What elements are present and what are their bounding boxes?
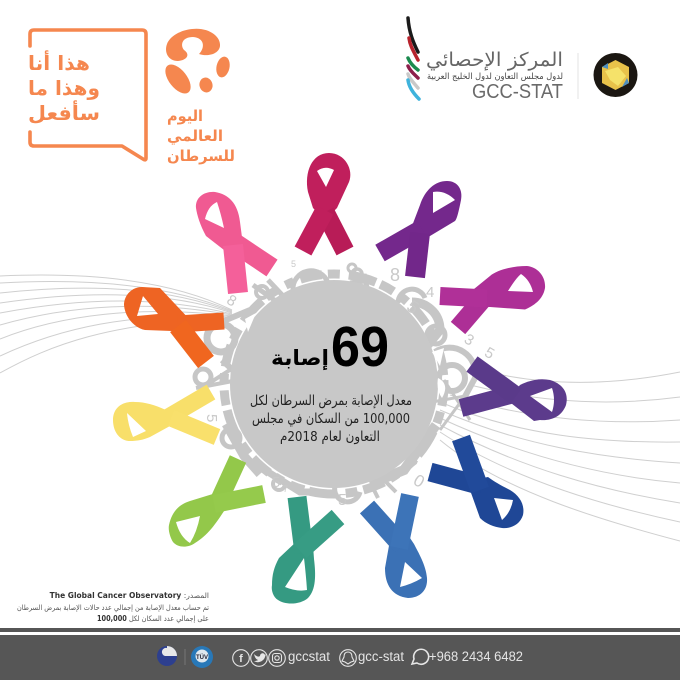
phone number: +968 2434 6482 xyxy=(429,649,523,664)
arabic name: المركز الإحصائي xyxy=(426,49,563,71)
ribbon: green xyxy=(169,459,264,547)
scattered digits: 4 xyxy=(426,284,434,301)
ribbon: pink xyxy=(196,192,272,293)
scattered digits: 5 xyxy=(291,259,296,269)
slogan text: سأفعل xyxy=(28,99,100,125)
ribbon: deep purple xyxy=(461,364,567,421)
ribbon: yellow xyxy=(113,392,217,441)
source note: تم حساب معدل الإصابة من إجمالي عدد حالات الإصابة بمرض السرطان xyxy=(17,603,209,612)
scattered digits: 3 xyxy=(461,331,477,349)
scattered digits: 0 xyxy=(410,471,428,492)
scattered digits: 8 xyxy=(224,291,239,310)
description: التعاون لعام 2018م xyxy=(280,429,380,445)
footer band xyxy=(0,628,680,680)
scattered digits: 5 xyxy=(403,296,423,318)
logo caption: للسرطان xyxy=(167,147,235,165)
ribbon: navy xyxy=(430,438,523,528)
source note xyxy=(17,591,209,623)
source note: المصدر: The Global Cancer Observatory xyxy=(50,591,209,600)
description xyxy=(250,393,412,445)
ribbon: teal xyxy=(272,497,338,604)
social icons xyxy=(233,650,285,666)
slogan text xyxy=(28,49,100,125)
icon: cancer day figure xyxy=(160,29,232,98)
handle gcc-stat: gcc-stat xyxy=(358,649,404,664)
scattered digits: 5 xyxy=(338,492,347,509)
scattered digits: 5 xyxy=(272,474,280,491)
arabic subtitle: لدول مجلس التعاون لدول الخليج العربية xyxy=(427,72,563,82)
icon: TUV badge: TÜV xyxy=(196,654,208,661)
footer band: f xyxy=(239,653,243,665)
unit label: إصابة xyxy=(271,346,329,370)
ribbon: magenta xyxy=(440,266,545,328)
icon: GCC seal xyxy=(594,53,638,97)
main gray disc xyxy=(230,280,438,488)
description: 100,000 من السكان في مجلس xyxy=(252,411,410,427)
logo caption: اليوم xyxy=(167,107,203,125)
slogan text: وهذا ما xyxy=(28,76,100,100)
scattered digits xyxy=(203,259,497,509)
ribbon: steel blue xyxy=(367,495,427,598)
scattered digits: 5 xyxy=(482,344,497,363)
icon: certification badge xyxy=(157,646,177,666)
icon: TUV badge xyxy=(191,646,213,668)
logo: GCC-STAT xyxy=(408,18,638,103)
scattered digits: 5 xyxy=(203,414,220,422)
logo caption: العالمي xyxy=(167,127,223,145)
ribbon: purple xyxy=(380,181,461,277)
icon: whatsapp xyxy=(412,649,429,664)
source note: على إجمالي عدد السكان لكل 100,000 xyxy=(97,614,209,623)
central circle with number ornaments xyxy=(195,259,497,509)
description: معدل الإصابة بمرض السرطان لكل xyxy=(250,393,412,409)
number 69: 69 xyxy=(331,315,389,379)
icon: snapchat xyxy=(340,650,356,666)
scattered digits: 7 xyxy=(283,484,288,494)
ornaments ring xyxy=(195,264,475,502)
speech bubble outline xyxy=(30,30,146,160)
logo caption xyxy=(167,107,235,165)
ribbon: orange xyxy=(124,287,224,362)
ribbon: crimson xyxy=(303,153,350,251)
handle gccstat: gccstat xyxy=(288,649,330,664)
logo: world cancer day xyxy=(28,29,235,165)
icon: coloured stripes xyxy=(408,18,419,99)
GCC-STAT wordmark: GCC-STAT xyxy=(472,81,563,103)
scattered digits: 8 xyxy=(390,265,400,285)
slogan text: هذا أنا xyxy=(28,49,90,75)
